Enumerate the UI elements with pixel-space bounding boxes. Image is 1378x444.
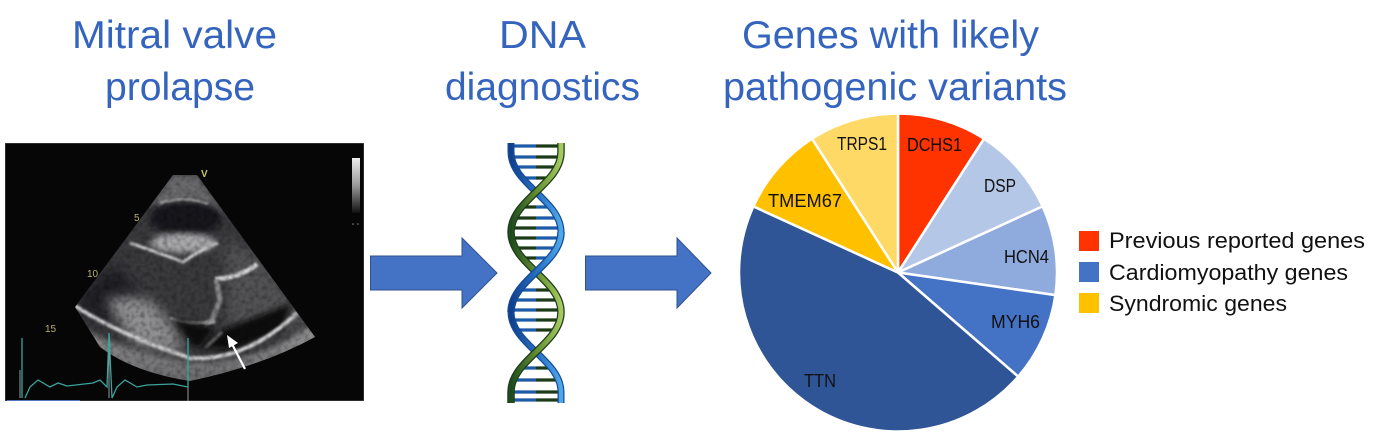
slice: HCN4 [898, 206, 1057, 295]
legend [1079, 228, 1365, 316]
arrow: DNA to genes [586, 238, 711, 308]
title: genes with likely pathogenic variants [723, 14, 1067, 109]
pie labels: HCN4 [1004, 247, 1049, 267]
ECG trace [7, 333, 188, 401]
blue strand back [511, 143, 561, 403]
depth labels: 5 [134, 213, 140, 224]
title: DNA diagnostics: diagnostics [445, 66, 640, 109]
echocardiogram image [5, 143, 364, 401]
pie labels: TTN [804, 371, 836, 391]
blue strand front [511, 232, 561, 312]
depth labels [45, 169, 208, 335]
slice: TMEM67 [753, 139, 898, 272]
title: genes with likely pathogenic variants: Genes with likely [742, 14, 1040, 57]
title: DNA diagnostics [445, 14, 640, 109]
pie labels: MYH6 [991, 312, 1040, 332]
slice: MYH6 [898, 272, 1055, 377]
pie chart: genes with likely pathogenic variants [739, 113, 1057, 432]
icon: DNA double helix [510, 143, 562, 403]
pie labels: DCHS1 [907, 135, 962, 155]
slice: TTN [739, 206, 1018, 432]
pie labels: DSP [984, 176, 1016, 196]
rungs [510, 146, 562, 400]
title: genes with likely pathogenic variants: pathogenic variants [723, 66, 1067, 109]
ultrasound sector [75, 175, 315, 381]
depth labels: V [201, 169, 208, 180]
arrow: echo to DNA [370, 238, 497, 308]
green strand [511, 143, 561, 403]
title: mitral valve prolapse: Mitral valve [72, 14, 277, 57]
title: mitral valve prolapse [72, 14, 277, 109]
slice: DSP [898, 139, 1043, 272]
slice: TRPS1 [812, 113, 898, 272]
pie labels [768, 134, 1049, 391]
legend: Previous reported genes [1109, 228, 1365, 253]
pie labels: TRPS1 [837, 134, 887, 154]
legend: Cardiomyopathy genes [1109, 260, 1348, 285]
depth labels: 15 [45, 324, 57, 335]
slice: DCHS1 [898, 113, 984, 272]
white arrow on echo [227, 335, 245, 369]
title: mitral valve prolapse: prolapse [105, 66, 255, 109]
legend: Syndromic genes [1109, 291, 1287, 316]
title: DNA diagnostics: DNA [499, 14, 586, 57]
depth labels: 10 [87, 269, 99, 280]
pie labels: TMEM67 [768, 191, 842, 211]
grayscale bar [352, 158, 360, 225]
